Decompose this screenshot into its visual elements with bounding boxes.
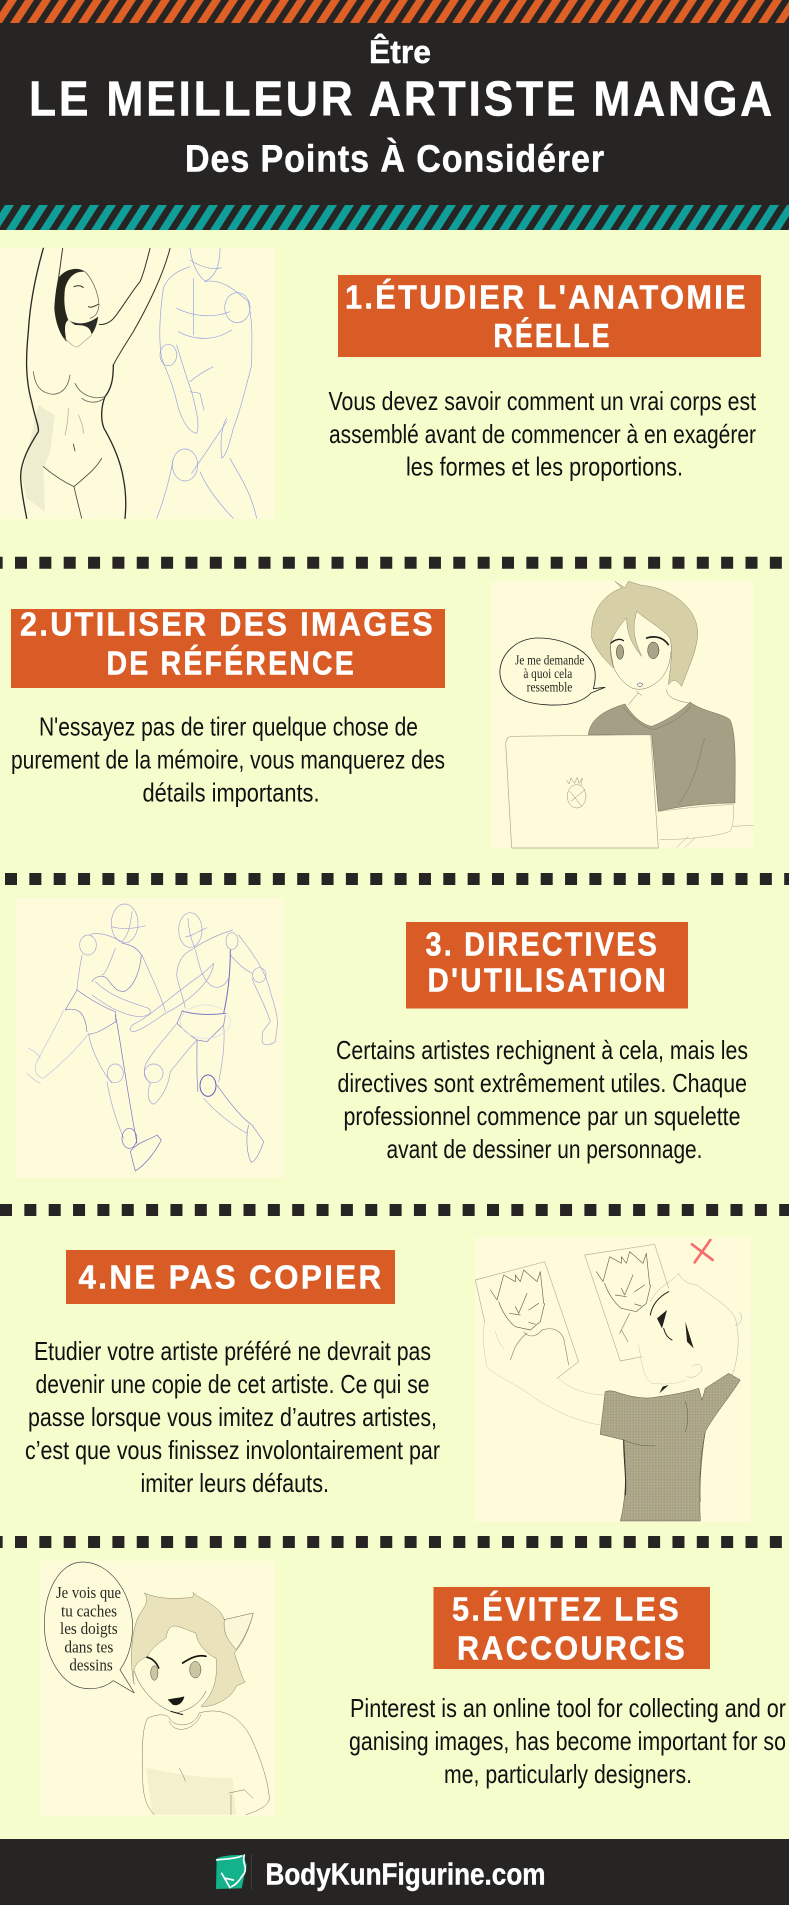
body text 4: Etudier votre artiste préféré ne devrait pas — [34, 1336, 431, 1366]
footer — [0, 1839, 789, 1905]
panel: section 2 — [11, 581, 753, 848]
illustration: guideline skeleton figures — [16, 898, 284, 1178]
panel: section 4 — [25, 1237, 751, 1522]
body text 2 — [11, 712, 445, 808]
divider 3 — [0, 1204, 789, 1216]
illustration: boy at laptop — [491, 581, 753, 848]
orange stripe band — [0, 0, 789, 23]
heading box 5: RACCOURCIS — [457, 1630, 687, 1666]
speech bubble: les doigts — [60, 1619, 118, 1638]
body text 1: les formes et les proportions. — [406, 452, 683, 482]
speech bubble: dans tes — [64, 1637, 113, 1656]
body text 4: c’est que vous finissez involontairement par — [25, 1435, 440, 1465]
panel: section 3 — [16, 898, 748, 1178]
heading box 1: RÉELLE — [494, 317, 612, 354]
divider 4 — [0, 1536, 789, 1548]
body text 2: détails importants. — [142, 778, 320, 808]
body text 4: devenir une copie de cet artiste. Ce qui se — [36, 1369, 430, 1399]
icon: red cross — [692, 1240, 713, 1262]
illustration: anatomy sketch — [0, 248, 275, 519]
speech bubble — [44, 1562, 134, 1693]
heading box 4 — [66, 1250, 395, 1304]
speech bubble — [500, 638, 605, 705]
panel: section 5 — [40, 1561, 786, 1816]
heading box 3: 3. DIRECTIVES — [426, 926, 659, 962]
body text 4: imiter leurs défauts. — [140, 1468, 329, 1498]
header banner — [0, 0, 789, 230]
heading box 5 — [434, 1587, 710, 1669]
panel: section 1 — [0, 248, 761, 519]
heading box 5: 5.ÉVITEZ LES — [452, 1590, 681, 1628]
divider 2 — [0, 873, 789, 885]
speech bubble: tu caches — [61, 1601, 117, 1620]
heading box 2: DE RÉFÉRENCE — [106, 644, 356, 682]
speech bubble: dessins — [69, 1655, 113, 1674]
title — [29, 34, 775, 180]
heading box 1: 1.ÉTUDIER L'ANATOMIE — [345, 278, 748, 316]
body text 4 — [25, 1336, 440, 1498]
body text 2: N'essayez pas de tirer quelque chose de — [39, 712, 418, 742]
website name: BodyKunFigurine.com — [266, 1856, 546, 1892]
body text 1 — [328, 386, 757, 482]
divider 1 — [0, 557, 789, 569]
body text 4: passe lorsque vous imitez d’autres artistes, — [28, 1402, 437, 1432]
title: Être — [369, 34, 431, 70]
heading box 4: 4.NE PAS COPIER — [78, 1258, 384, 1296]
speech bubble: Je vois que — [56, 1583, 121, 1602]
icon: logo — [216, 1854, 251, 1889]
body text 5: me, particularly designers. — [444, 1759, 692, 1789]
body text 2: purement de la mémoire, vous manquerez des — [11, 744, 445, 774]
heading box 3 — [406, 922, 688, 1008]
body text 3: avant de dessiner un personnage. — [386, 1134, 702, 1164]
heading box 2 — [11, 606, 445, 688]
title: Des Points À Considérer — [185, 136, 605, 180]
speech bubble: ressemble — [527, 680, 572, 695]
heading box 1 — [338, 275, 761, 357]
heading box 2: 2.UTILISER DES IMAGES — [20, 606, 435, 642]
illustration: boy holding references — [475, 1237, 751, 1522]
speech bubble: Je me demande — [515, 653, 584, 668]
heading box 3: D'UTILISATION — [428, 962, 668, 998]
body text 3 — [336, 1035, 748, 1164]
teal stripe band — [0, 205, 789, 230]
body text 5 — [349, 1693, 786, 1789]
illustration: cat-eared girl — [40, 1561, 275, 1816]
speech bubble: à quoi cela — [523, 666, 572, 681]
